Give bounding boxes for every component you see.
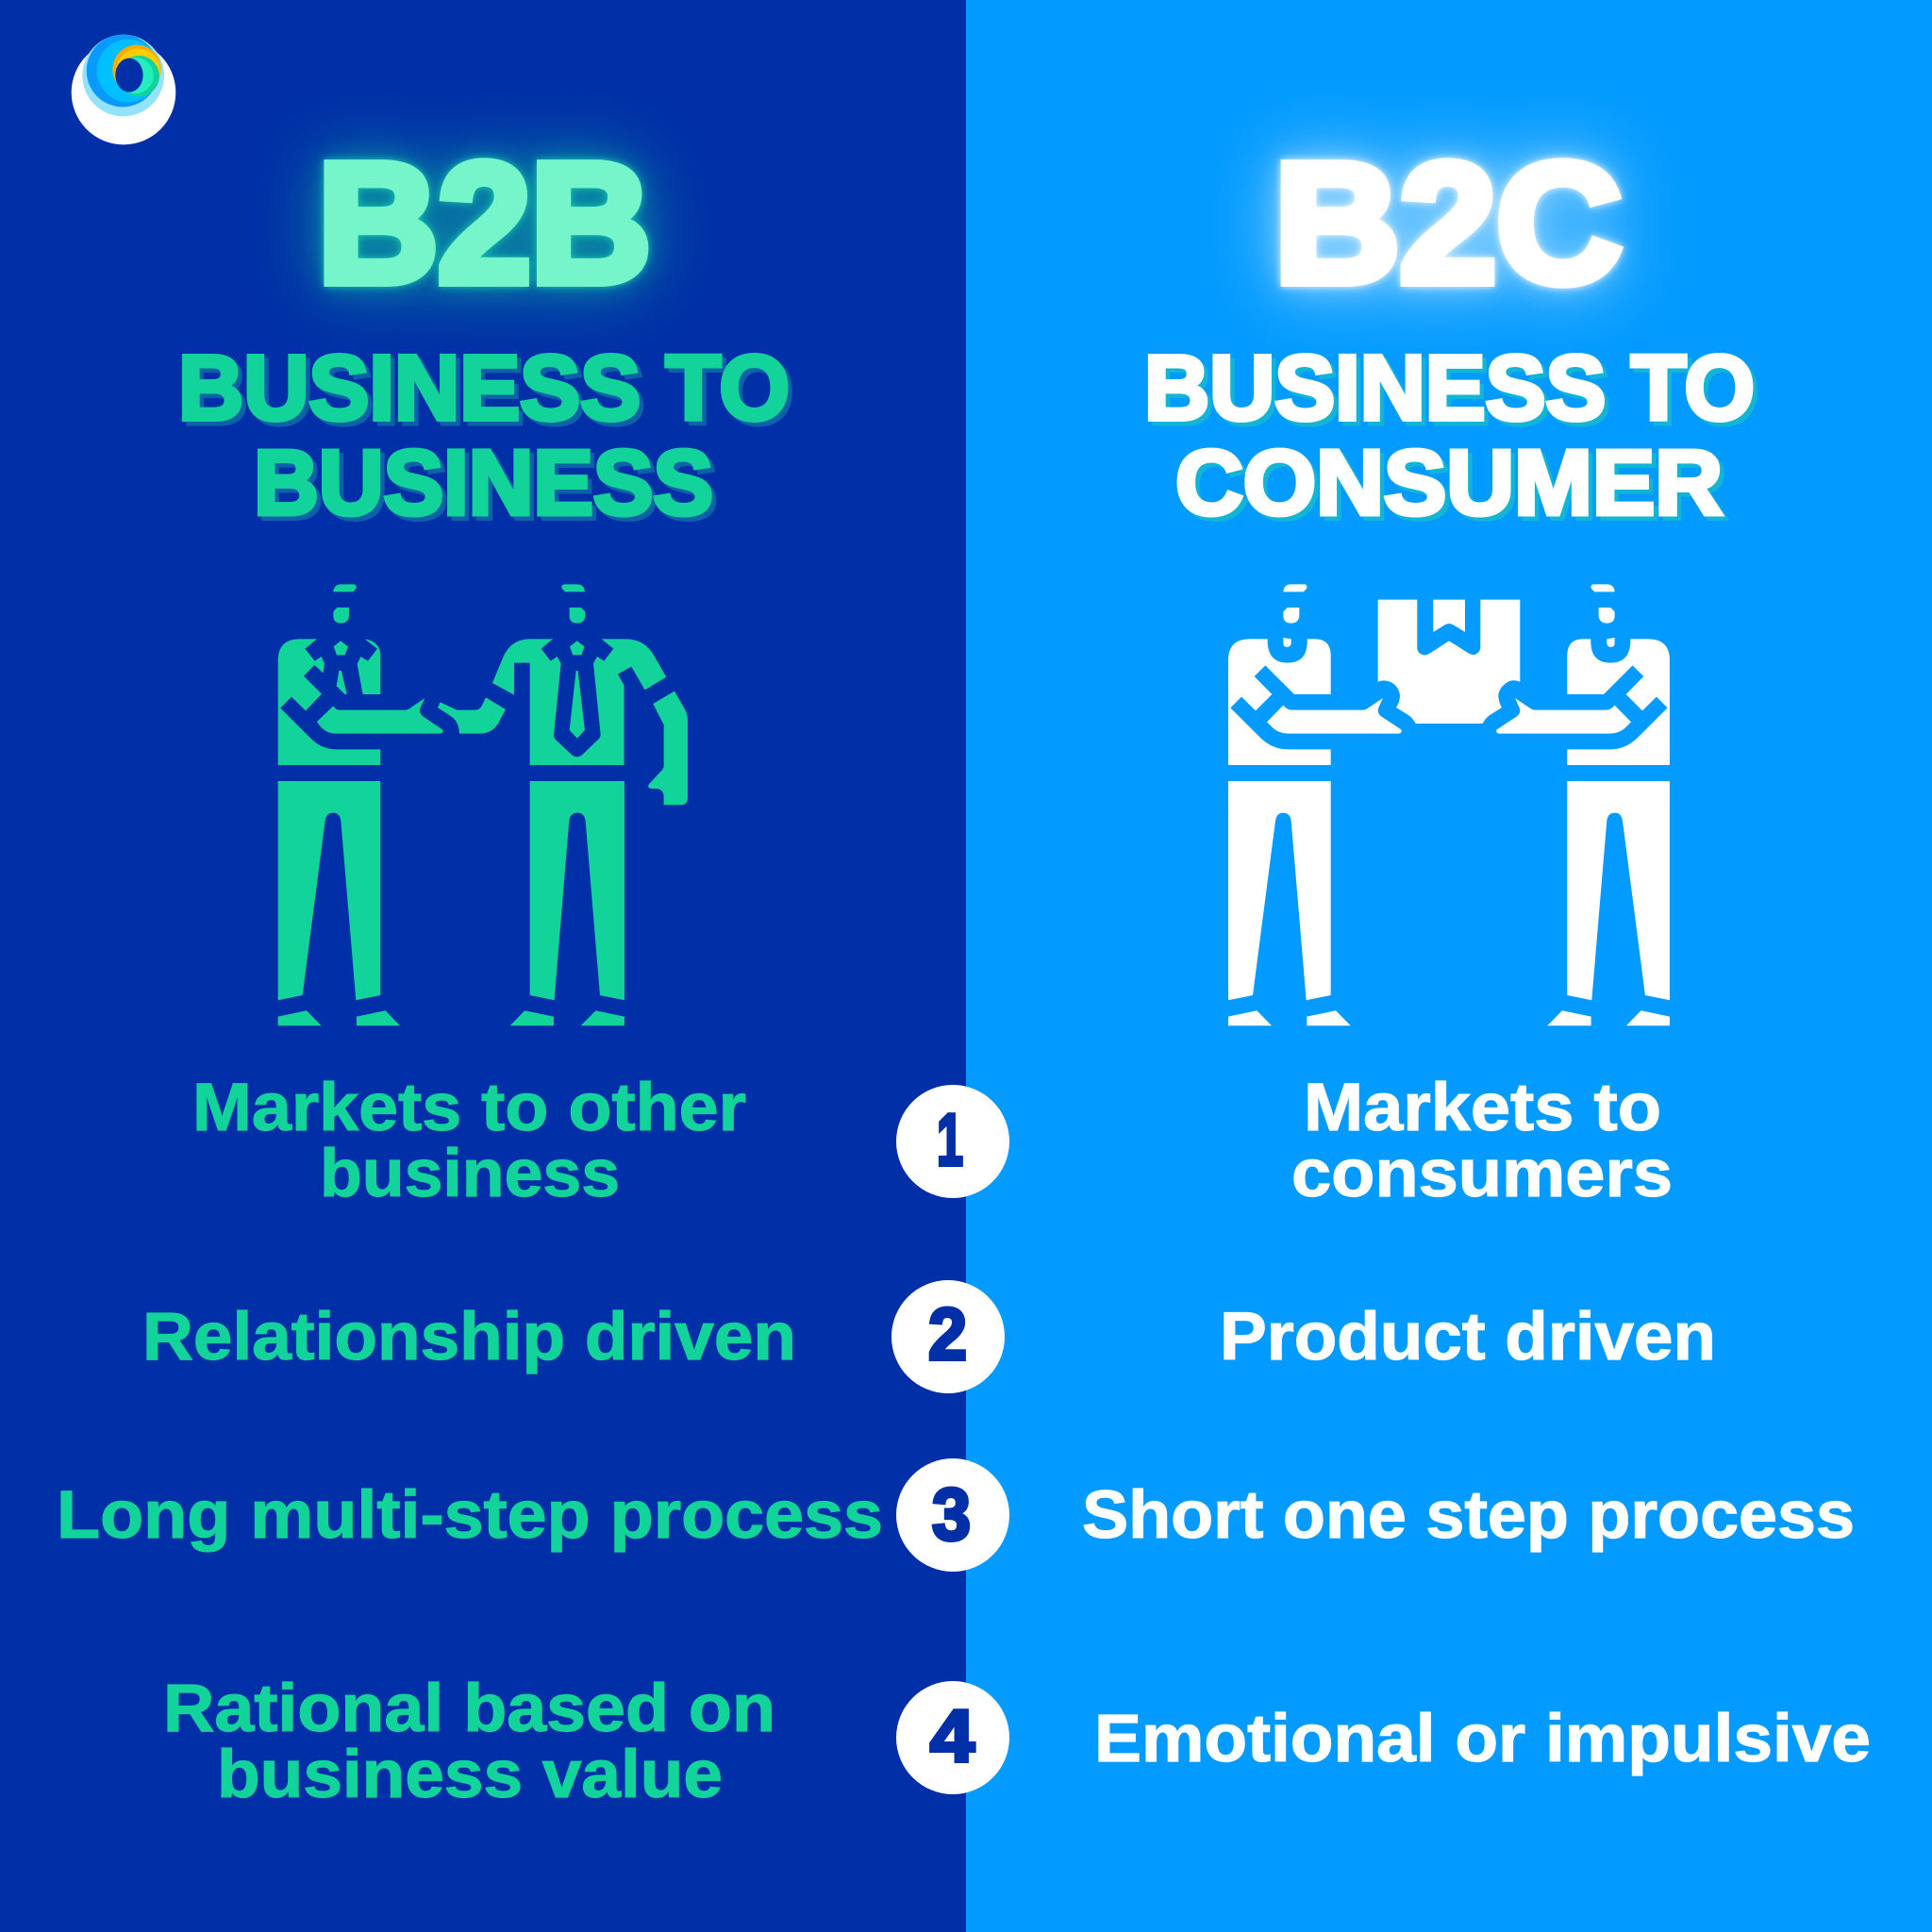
text: B2C point 1: Markets to — [1304, 1071, 1661, 1145]
text: B2B point 2: Relationship driven — [142, 1300, 796, 1374]
text: B2B point 1: business — [320, 1137, 620, 1211]
icon: two businessmen shaking hands — [278, 584, 688, 1025]
heading: Business to Consumer — [1144, 336, 1755, 534]
heading: Business to Consumer: CONSUMER — [1175, 431, 1723, 534]
text: B2B point 1 — [192, 1071, 746, 1211]
panel: B2B background — [0, 0, 966, 1932]
icon: two people passing a parcel — [1228, 584, 1670, 1025]
heading: Business to Consumer: BUSINESS TO — [1144, 336, 1755, 440]
title: B2C: B2C — [1274, 128, 1622, 319]
text: B2C point 1: consumers — [1291, 1137, 1673, 1211]
badge: number 4 — [896, 1681, 1009, 1794]
badge: number 2: 2 — [928, 1292, 967, 1375]
badge: number 1: 1 — [937, 1098, 963, 1181]
text: B2C point 4: Emotional or impulsive — [1094, 1702, 1871, 1776]
text: B2B point 4: business value — [217, 1738, 723, 1812]
badge: number 1 — [896, 1085, 1009, 1198]
badge: number 4: 4 — [930, 1694, 974, 1777]
heading: Business to Business: BUSINESS — [254, 431, 713, 534]
text: B2B point 4 — [163, 1672, 775, 1812]
panel: B2C background — [966, 0, 1932, 1932]
badge: number 2 — [891, 1280, 1005, 1393]
text: B2C point 2: Product driven — [1220, 1300, 1716, 1374]
icon: logo — [72, 35, 175, 144]
text: B2C point 1 — [1291, 1071, 1673, 1211]
text: B2B point 4: Rational based on — [163, 1672, 775, 1746]
heading: Business to Business — [178, 336, 790, 534]
badge: number 3: 3 — [932, 1473, 971, 1556]
title: B2B: B2B — [318, 128, 651, 319]
badge: number 3 — [896, 1458, 1009, 1572]
text: B2C point 3: Short one step process — [1082, 1478, 1855, 1553]
text: B2B point 3: Long multi-step process — [57, 1478, 883, 1553]
heading: Business to Business: BUSINESS TO — [178, 336, 790, 440]
text: B2B point 1: Markets to other — [192, 1071, 746, 1145]
